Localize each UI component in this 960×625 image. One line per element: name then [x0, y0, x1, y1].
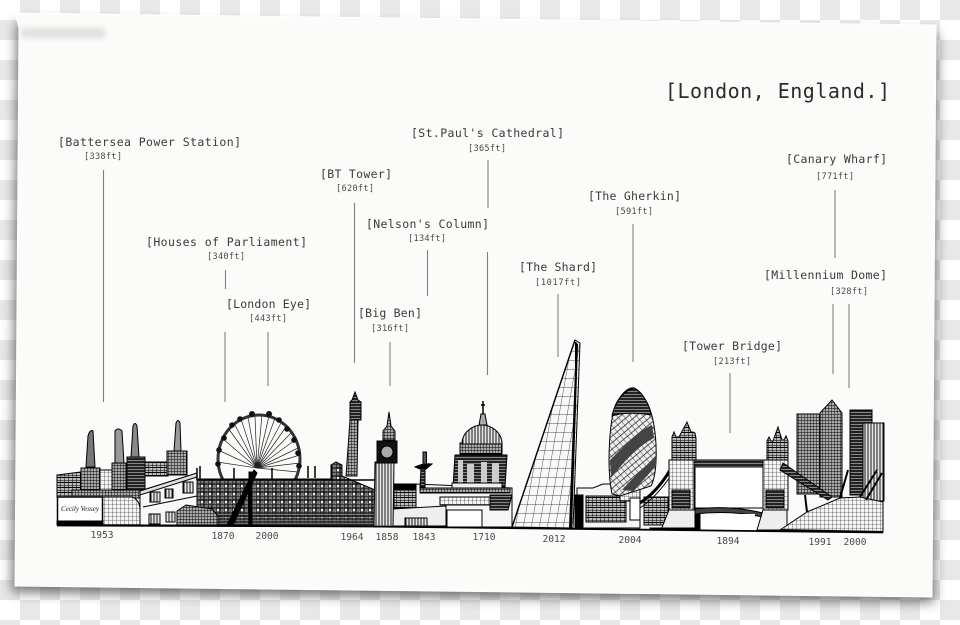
- label: Big Ben: [358, 306, 422, 386]
- label: Houses of Parliament: [Houses of Parliament]: [146, 235, 307, 249]
- label: The Gherkin: [The Gherkin]: [588, 189, 681, 203]
- label: Battersea Power Station: [Battersea Power Station]: [58, 135, 241, 149]
- year labels: 2000: [255, 531, 279, 542]
- label: The Shard: [519, 260, 597, 357]
- label: London Eye: [London Eye]: [226, 297, 311, 311]
- label: Houses of Parliament: [340ft]: [207, 252, 245, 262]
- logo: Cecily Vessey: [57, 497, 103, 525]
- label: The Shard: [1017ft]: [535, 278, 581, 288]
- label: Canary Wharf: [771ft]: [816, 172, 854, 182]
- year labels: 1991: [808, 537, 832, 548]
- landmark: Tower Bridge: [640, 422, 788, 530]
- title: [London, England.]: [665, 79, 890, 103]
- landmark: The Shard: [512, 340, 580, 528]
- label: Millennium Dome: [328ft]: [830, 287, 868, 297]
- label: Tower Bridge: [Tower Bridge]: [682, 339, 782, 353]
- logo: Cecily Vessey: Cecily Vessey: [61, 505, 100, 513]
- landmark: The Gherkin: [609, 388, 656, 496]
- label: London Eye: [226, 297, 311, 386]
- landmark: London Eye legs: [227, 470, 257, 525]
- building: Battersea Power Station: [57, 420, 187, 525]
- label: The Gherkin: [588, 189, 681, 362]
- year labels: 1870: [211, 531, 235, 542]
- label: St.Paul's Cathedral: [St.Paul's Cathedral]: [411, 126, 564, 140]
- landmark: St Paul's Cathedral: [452, 401, 507, 488]
- low buildings: City: [575, 484, 668, 528]
- label: Big Ben: [316ft]: [371, 324, 409, 334]
- building: white terrace: [140, 473, 197, 525]
- low buildings: central: [392, 484, 512, 527]
- landmark: Canary Wharf towers: [797, 400, 884, 501]
- label: BT Tower: [620ft]: [336, 184, 374, 194]
- year labels: 2000: [843, 537, 867, 548]
- label: London Eye: [443ft]: [249, 314, 287, 324]
- label: Nelson's Column: [Nelson's Column]: [366, 217, 489, 231]
- label: The Shard: [The Shard]: [519, 260, 597, 274]
- year labels: 1964: [340, 532, 364, 543]
- label: Canary Wharf: [786, 152, 887, 374]
- landmark: Tower Bridge suspension: [780, 463, 832, 500]
- skyline illustration: [57, 340, 884, 532]
- label: Nelson's Column: [366, 217, 489, 296]
- year labels: 2004: [618, 535, 642, 546]
- label: Big Ben: [Big Ben]: [358, 306, 422, 320]
- landmark: Big Ben: [374, 412, 397, 527]
- label: Houses of Parliament: [146, 235, 307, 402]
- label: Nelson's Column: [134ft]: [408, 234, 446, 244]
- label: St.Paul's Cathedral: [411, 126, 564, 375]
- label: Battersea Power Station: [338ft]: [84, 152, 122, 162]
- year labels: 1894: [716, 536, 740, 547]
- building: small roof: [177, 505, 218, 525]
- ground line: [57, 526, 883, 532]
- label: Battersea Power Station: [58, 135, 241, 402]
- year labels: 1843: [412, 532, 436, 543]
- year labels: 1858: [375, 532, 399, 543]
- building: Houses of Parliament: [197, 462, 375, 526]
- label: Tower Bridge: [213ft]: [713, 357, 751, 367]
- year labels: 1953: [90, 530, 114, 541]
- label: Millennium Dome: [Millennium Dome]: [764, 268, 887, 282]
- label: Tower Bridge: [682, 339, 782, 433]
- label: Canary Wharf: [Canary Wharf]: [786, 152, 887, 166]
- label: The Gherkin: [591ft]: [615, 207, 653, 217]
- label: Millennium Dome: [764, 268, 887, 388]
- landmark: Millennium Dome: [780, 470, 883, 532]
- landmark: London Eye wheel: [215, 411, 302, 503]
- year labels: 2012: [542, 534, 566, 545]
- year labels: 1710: [472, 532, 496, 543]
- label: BT Tower: [BT Tower]: [320, 167, 392, 181]
- landmark: Nelson's Column: [415, 452, 432, 487]
- label: St.Paul's Cathedral: [365ft]: [468, 144, 506, 154]
- landmark: BT Tower: [346, 392, 361, 476]
- label: BT Tower: [320, 167, 392, 363]
- year labels: [90, 530, 867, 548]
